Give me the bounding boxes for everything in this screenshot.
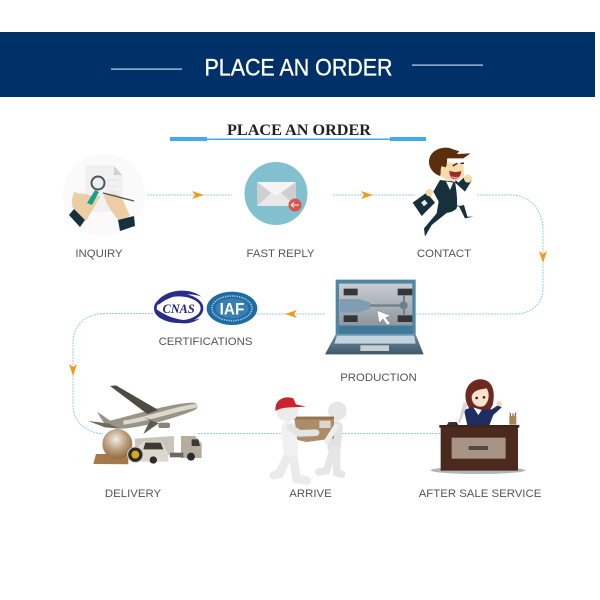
- icon: running businessman: [413, 148, 473, 237]
- icon: laptop: [325, 280, 424, 354]
- seal: [128, 447, 143, 462]
- connector: certifications to delivery: [69, 314, 153, 434]
- parcels: [93, 454, 128, 464]
- plane: [88, 385, 198, 434]
- connector: delivery to arrive: [198, 432, 282, 434]
- pencil cup and phone: [447, 413, 516, 425]
- second figure arm: [327, 427, 336, 441]
- connector: contact to production: [416, 195, 547, 314]
- second figure: [319, 402, 347, 474]
- desk shadow: [431, 467, 525, 474]
- connector: production to certifications: [257, 310, 325, 318]
- icon: fast reply envelope: [244, 162, 308, 225]
- section heading: PLACE AN ORDER: [227, 122, 371, 139]
- first figure: [274, 397, 316, 481]
- connector: arrive to after sale service: [342, 432, 441, 434]
- logo: CNAS: CNAS: [163, 302, 195, 316]
- receptionist: [458, 379, 502, 425]
- logo: IAF: IAF: [220, 299, 244, 318]
- icon: certification logos: [155, 291, 257, 325]
- banner title: PLACE AN ORDER: [204, 54, 392, 82]
- desk: [439, 425, 519, 471]
- label: contact: CONTACT: [417, 248, 471, 260]
- truck: [135, 436, 202, 464]
- label: delivery: DELIVERY: [105, 488, 161, 500]
- icon: inquiry hands with magnifier: [63, 154, 145, 236]
- header banner: [0, 32, 595, 97]
- label: production: PRODUCTION: [340, 372, 417, 384]
- icon: receptionist at desk: [431, 379, 525, 474]
- label: fast reply: FAST REPLY: [247, 248, 315, 260]
- label: after sale service: AFTER SALE SERVICE: [419, 488, 542, 500]
- label: arrive: ARRIVE: [289, 488, 332, 500]
- icon: delivery plane, globe and truck: [88, 385, 202, 464]
- section heading: [170, 122, 426, 141]
- label: certifications: CERTIFICATIONS: [159, 336, 253, 348]
- icon: two figures carrying a box: [274, 397, 347, 481]
- connector: inquiry to fast reply: [147, 191, 232, 199]
- globe: [102, 429, 132, 459]
- connector: fast reply to contact: [333, 191, 415, 199]
- label: inquiry: INQUIRY: [75, 248, 123, 260]
- parcel: [294, 417, 334, 442]
